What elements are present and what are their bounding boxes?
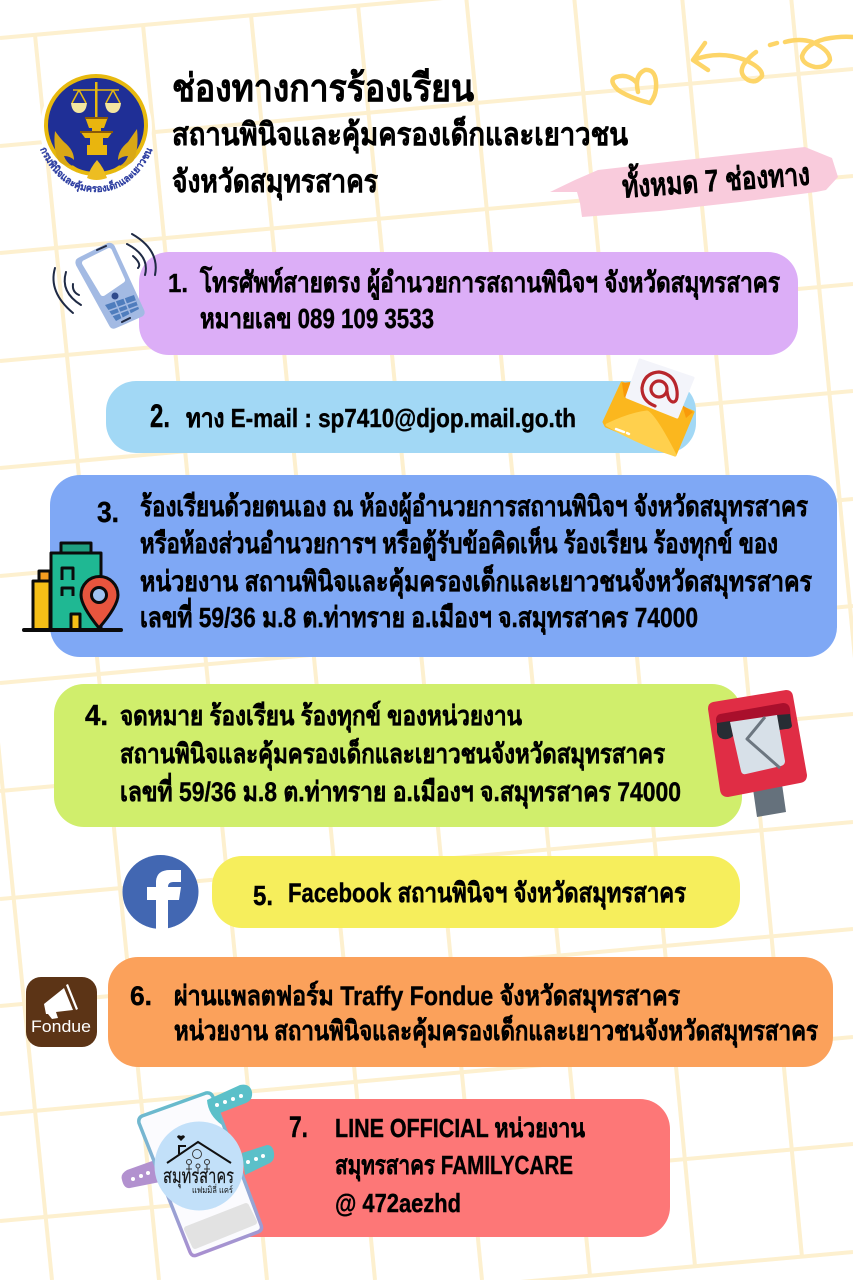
text: platform details <box>174 980 818 1048</box>
icon: facebook logo <box>122 855 198 929</box>
emblem: department seal <box>40 74 153 192</box>
panel 3: in person <box>50 475 837 657</box>
icon: building with location pin <box>24 543 121 630</box>
emblem: department seal: กรมพินิจและคุ้มครองเด็กและเยาวชน <box>40 148 153 192</box>
number 4: 4. <box>85 700 108 732</box>
icon: smartphone with chat bubbles and family care logo: สมุทรสาคร <box>163 1166 234 1189</box>
text: line account <box>335 1113 585 1218</box>
panel 2: e-mail <box>106 381 696 453</box>
icon: fondue app: Fondue <box>31 1017 91 1036</box>
text: phone number: หมายเลข 089 109 3533 <box>200 303 434 334</box>
title <box>172 68 628 201</box>
icon: red post box <box>708 690 807 817</box>
doodle: heart, arrow and loops <box>612 37 853 103</box>
panel 5: facebook <box>212 856 740 928</box>
text: in-person complaint details <box>140 491 812 635</box>
panel 1: direct phone <box>139 252 798 355</box>
text: mailing address: จดหมาย ร้องเรียน ร้องทุกข์ ของหน่วยงาน <box>120 700 522 733</box>
icon: fondue app <box>26 977 97 1047</box>
text: facebook page: Facebook สถานพินิจฯ จังหวัดสมุทรสาคร <box>288 878 686 910</box>
number 7: 7. <box>289 1111 308 1144</box>
heading line 1: ช่องทางการร้องเรียน <box>172 68 474 110</box>
number 1: 1. <box>168 268 188 298</box>
number 5: 5. <box>253 880 273 911</box>
panel 7: line official <box>200 1099 670 1237</box>
icon: open envelope with at sign <box>604 360 693 455</box>
icon: smartphone with chat bubbles and family care logo <box>122 1085 274 1256</box>
panel 4: letter <box>54 684 742 827</box>
heading line 3: จังหวัดสมุทรสาคร <box>172 164 378 201</box>
icon: ringing mobile phone <box>53 234 156 328</box>
panel 6: traffy fondue <box>108 957 833 1067</box>
text: in-person complaint details: เลขที่ 59/36 ม.8 ต.ท่าทราย อ.เมืองฯ จ.สมุทรสาคร 74000 <box>140 597 698 635</box>
number 2: 2. <box>150 398 170 434</box>
number 6: 6. <box>130 981 152 1011</box>
text: mailing address <box>120 700 681 809</box>
text: mailing address: สถานพินิจและคุ้มครองเด็กและเยาวชนจังหวัดสมุทรสาคร <box>120 736 665 771</box>
text: line account: @ 472aezhd <box>335 1188 461 1218</box>
text: platform details: ผ่านแพลตฟอร์ม Traffy Fondue จังหวัดสมุทรสาคร <box>174 980 680 1013</box>
text: line account: LINE OFFICIAL หน่วยงาน <box>335 1113 585 1143</box>
icon: smartphone with chat bubbles and family care logo: แฟมมิลี่ แคร์ <box>192 1183 233 1195</box>
callout: total 7 channels on pink brush <box>550 147 838 217</box>
text: mailing address: เลขที่ 59/36 ม.8 ต.ท่าทราย อ.เมืองฯ จ.สมุทรสาคร 74000 <box>120 772 681 809</box>
text: e-mail address: ทาง E-mail : sp7410@djop.mail.go.th <box>186 403 576 433</box>
text: line account: สมุทรสาคร FAMILYCARE <box>335 1150 573 1182</box>
heading line 2: สถานพินิจและคุ้มครองเด็กและเยาวชน <box>172 115 628 154</box>
number 3: 3. <box>97 497 119 529</box>
